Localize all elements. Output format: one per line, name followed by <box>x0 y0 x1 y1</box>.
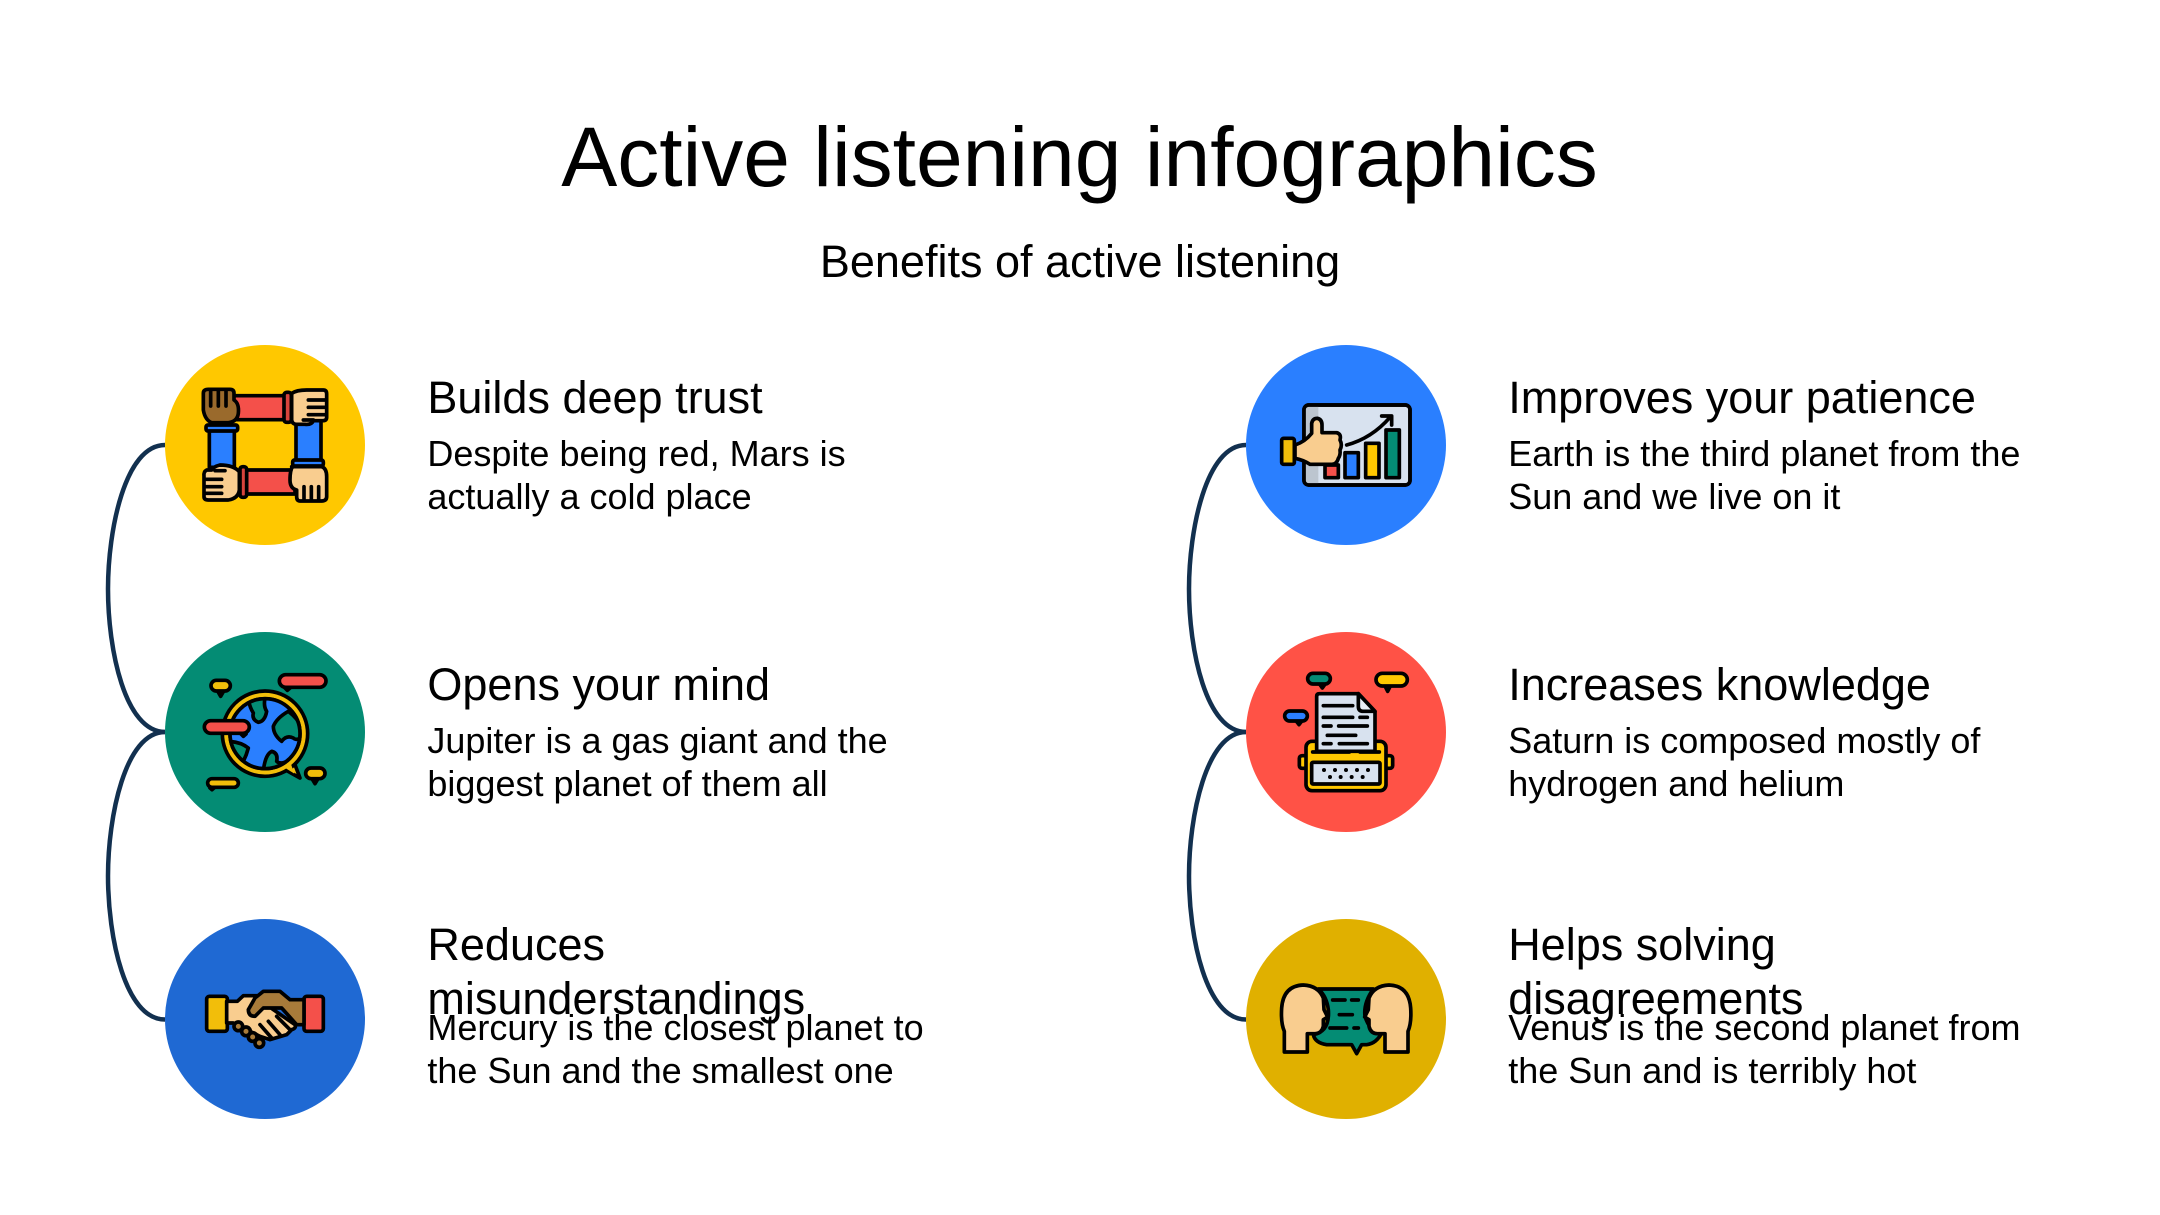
heading: Improves your patience <box>1508 372 1976 423</box>
connector: left column bottom <box>106 730 165 1022</box>
title: Active listening infographics <box>561 110 1598 204</box>
panel: opens your mind <box>165 632 888 832</box>
body text: biggest planet of them all <box>427 763 828 804</box>
panel: builds deep trust <box>165 345 846 545</box>
subtitle: Benefits of active listening <box>820 236 1340 287</box>
heading <box>427 919 805 1024</box>
connector: right column bottom <box>1186 730 1246 1022</box>
body text: actually a cold place <box>427 476 752 517</box>
body text: Despite being red, Mars is <box>427 433 846 474</box>
icon: typewriter <box>1246 632 1446 832</box>
heading: Builds deep trust <box>427 372 763 423</box>
panel: increases knowledge <box>1246 632 1980 832</box>
heading: Increases knowledge <box>1508 659 1931 710</box>
icon: handshake <box>165 919 365 1119</box>
body text <box>1508 1007 2021 1091</box>
body text <box>427 1007 924 1091</box>
body text: Sun and we live on it <box>1508 476 1840 517</box>
panel: improves your patience <box>1246 345 2020 545</box>
heading: Helps solving <box>1508 919 1776 970</box>
body text: Venus is the second planet from <box>1508 1007 2021 1048</box>
icon: thumbs up with chart <box>1246 345 1446 545</box>
body text: Jupiter is a gas giant and the <box>427 720 888 761</box>
body text <box>427 720 888 804</box>
icon: four linked arms <box>165 345 365 545</box>
heading <box>1508 919 1803 1024</box>
body text: the Sun and the smallest one <box>427 1050 894 1091</box>
panel: helps solving disagreements <box>1246 919 2021 1119</box>
body text <box>1508 720 1980 804</box>
connector: left column top <box>106 442 165 734</box>
body text: hydrogen and helium <box>1508 763 1844 804</box>
body text: the Sun and is terribly hot <box>1508 1050 1916 1091</box>
heading: Reduces <box>427 919 605 970</box>
panel: reduces misunderstandings <box>165 919 924 1119</box>
heading: misunderstandings <box>427 973 805 1024</box>
connector: right column top <box>1186 442 1246 734</box>
body text <box>1508 433 2020 517</box>
icon: two heads talking <box>1246 919 1446 1119</box>
icon: globe speech bubble <box>165 632 365 832</box>
body text: Earth is the third planet from the <box>1508 433 2020 474</box>
heading: Opens your mind <box>427 659 770 710</box>
body text: Mercury is the closest planet to <box>427 1007 924 1048</box>
body text <box>427 433 846 517</box>
body text: Saturn is composed mostly of <box>1508 720 1980 761</box>
heading: disagreements <box>1508 973 1803 1024</box>
